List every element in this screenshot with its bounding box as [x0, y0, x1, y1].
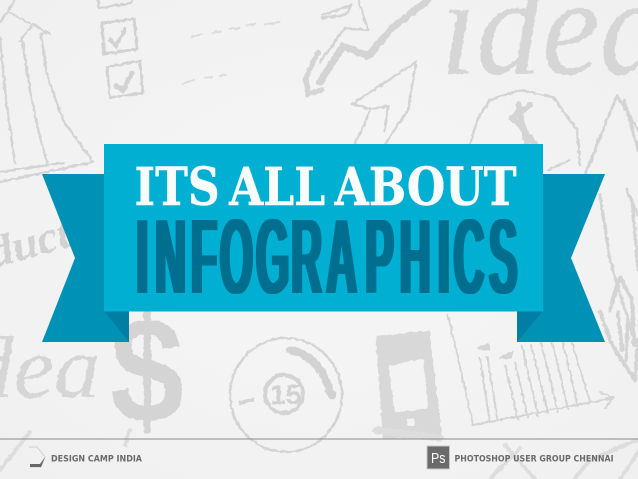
- ribbon tail: left: [42, 174, 129, 342]
- doodle: checklist: [98, 0, 280, 98]
- doodle: arrow top left: [0, 0, 93, 182]
- footer divider: [0, 438, 638, 440]
- label: design camp india: DESIGN CAMP INDIA: [51, 454, 142, 464]
- doodle: right arrow: [585, 95, 638, 380]
- doodle: bar chart: [448, 315, 613, 425]
- heading: infographics: INFOGRAPHICS: [136, 195, 517, 318]
- doodle: coin number: 15: [270, 379, 301, 410]
- doodle: coin: [230, 338, 342, 452]
- icon: photoshop: [427, 446, 450, 469]
- doodle: dollar circle: [470, 90, 580, 170]
- doodle: phone: [377, 332, 441, 438]
- label: photoshop user group chennai: PHOTOSHOP USER GROUP CHENNAI: [454, 454, 614, 464]
- ribbon fold: right: [517, 311, 543, 342]
- doodle: footer sketches: [0, 430, 638, 479]
- ribbon fold: left: [104, 311, 129, 342]
- banner: [42, 144, 605, 342]
- doodle: large dollar sign: $: [110, 286, 184, 454]
- icon: photoshop: Ps: [431, 450, 446, 467]
- banner panel: [104, 144, 543, 312]
- heading: its all about: ITS ALL ABOUT: [134, 157, 517, 218]
- footer: design camp india: [29, 447, 142, 467]
- doodle: zigzag arrow: [305, 0, 428, 144]
- footer: photoshop user group chennai: [427, 446, 614, 469]
- ribbon tail: right: [517, 174, 605, 342]
- icon: design camp logo: [29, 447, 45, 467]
